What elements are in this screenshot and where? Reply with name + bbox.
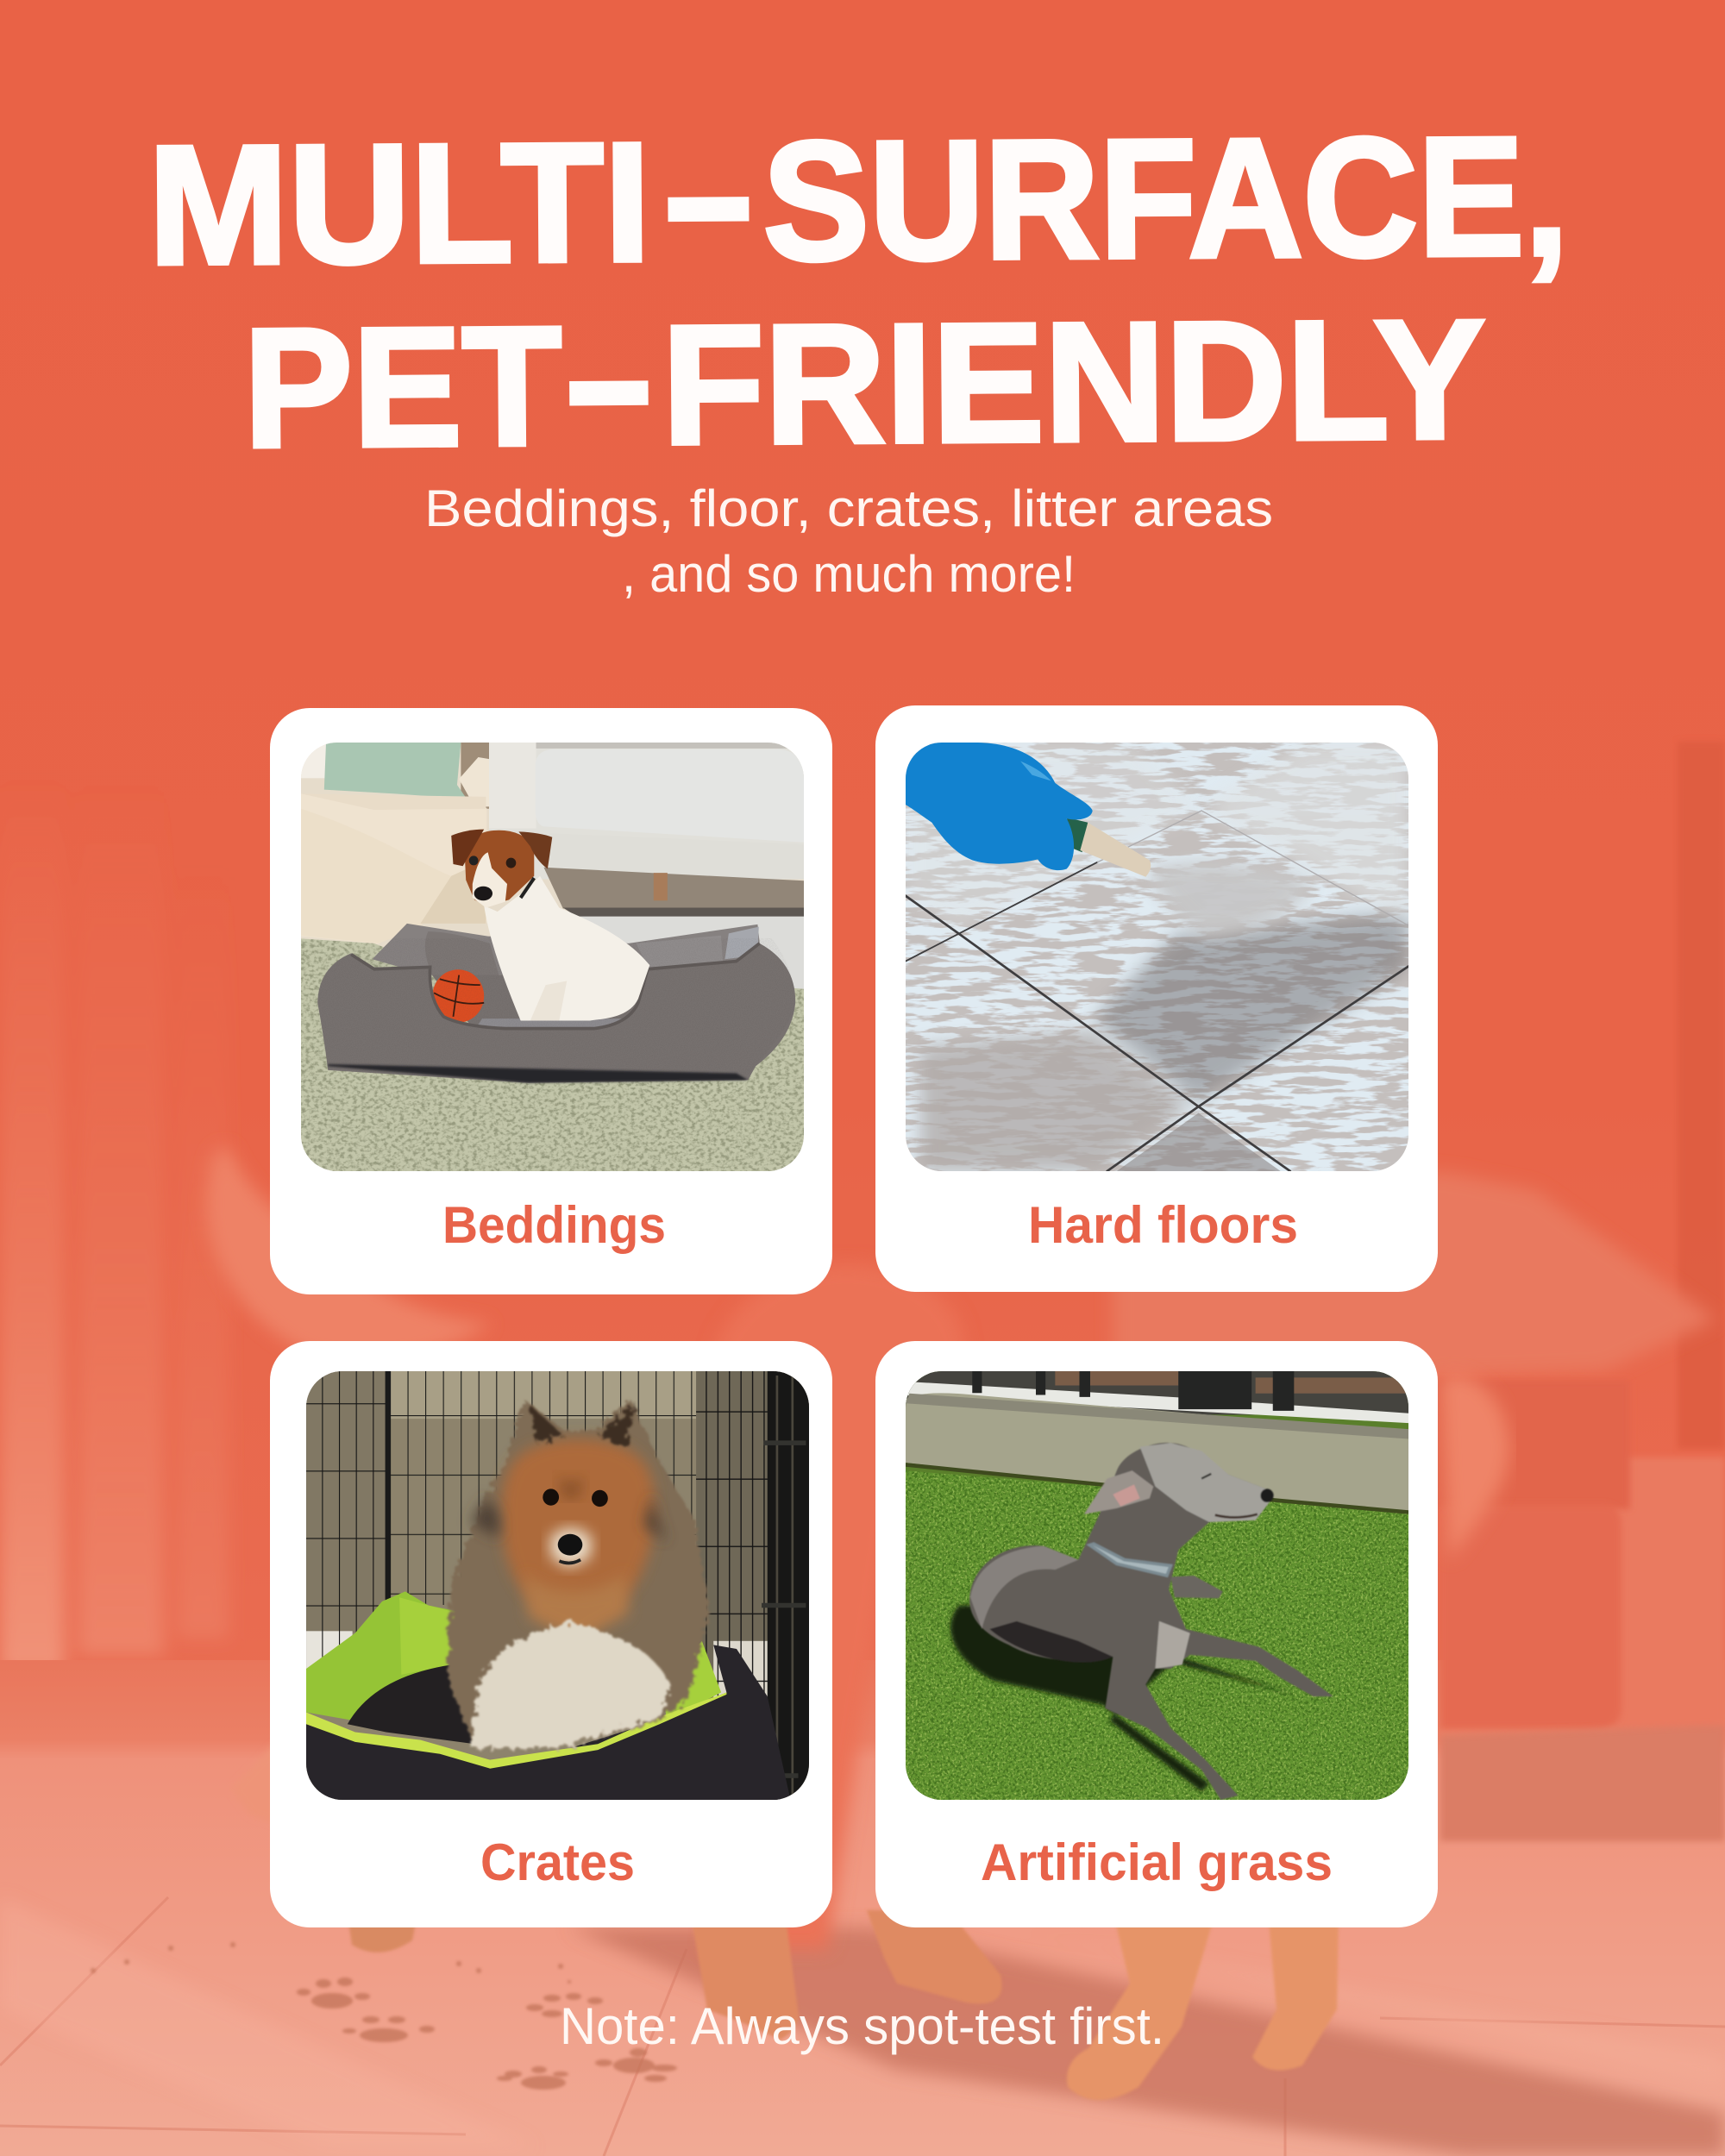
right wall panel [1678,742,1725,1449]
dog silhouette [206,1147,1509,2100]
dog [969,1443,1333,1800]
tail [206,1147,492,1361]
sofa [489,743,804,879]
label: Hard floors: Hard floors [1028,1196,1298,1254]
spray [1150,862,1314,936]
title [147,99,1569,483]
photo: terrier in grey dog bed [301,743,804,1171]
floor shadows and light [0,1897,1725,2156]
photo: sheltie in wire crate on green bed [306,1371,809,1800]
ball [432,969,484,1023]
rug [1440,1725,1725,1841]
front leg A [690,1910,799,2040]
title: PET [243,291,562,483]
glove [906,743,1093,870]
back wall and pillow [301,743,328,778]
rear leg C [1067,1910,1216,2100]
front leg B [867,1910,1002,2003]
panel: artificial grass [875,1341,1438,1927]
carpet [301,938,804,1171]
title: MULTI [147,107,651,300]
title: FRIENDLY [662,285,1486,480]
dog [448,1400,710,1748]
floor [0,1660,1725,2156]
label: Artificial grass: Artificial grass [981,1833,1333,1891]
concrete wall [906,1393,1408,1513]
head and body [707,1264,965,1949]
blanket [301,793,486,944]
under sofa [543,868,804,908]
grass [906,1470,1408,1800]
dog [451,830,649,1020]
sofa and pillow [1113,1164,1725,1733]
title: SURFACE, [762,101,1569,296]
floor tile lines [0,1897,1725,2156]
paw prints [91,1942,677,2090]
tile grout lines [906,811,1408,1171]
title: - [561,284,656,473]
wet tile highlights [906,743,1408,1171]
bed outer [317,943,795,1083]
subtitle: , and so much more! [622,545,1076,603]
panel: crates [270,1341,832,1927]
curtains [0,776,229,1673]
fence [906,1371,1408,1415]
panel: beddings [270,708,832,1294]
photo: gloved hand pressure-washing tiles [906,743,1408,1171]
paw small [347,1910,418,1952]
bed inner [373,924,762,975]
nozzle [1067,818,1151,877]
right leg blur [1440,1376,1509,1561]
note: Note: Always spot-test first. [560,1997,1164,2055]
label: Crates: Crates [480,1833,635,1891]
crate wires [390,1371,696,1605]
shadow [950,1605,1294,1791]
subtitle: Beddings, floor, crates, litter areas [424,479,1273,537]
label: Beddings: Beddings [442,1196,666,1254]
back paw [231,1742,276,1824]
photo: grey greyhound on artificial grass [906,1371,1408,1800]
bed [306,1591,474,1724]
subtitle [424,479,1273,603]
tile centre darker wet patch [1094,912,1408,1102]
rear leg D [1252,1910,1339,2071]
panel: hard floors [875,705,1438,1292]
title: - [660,99,757,290]
